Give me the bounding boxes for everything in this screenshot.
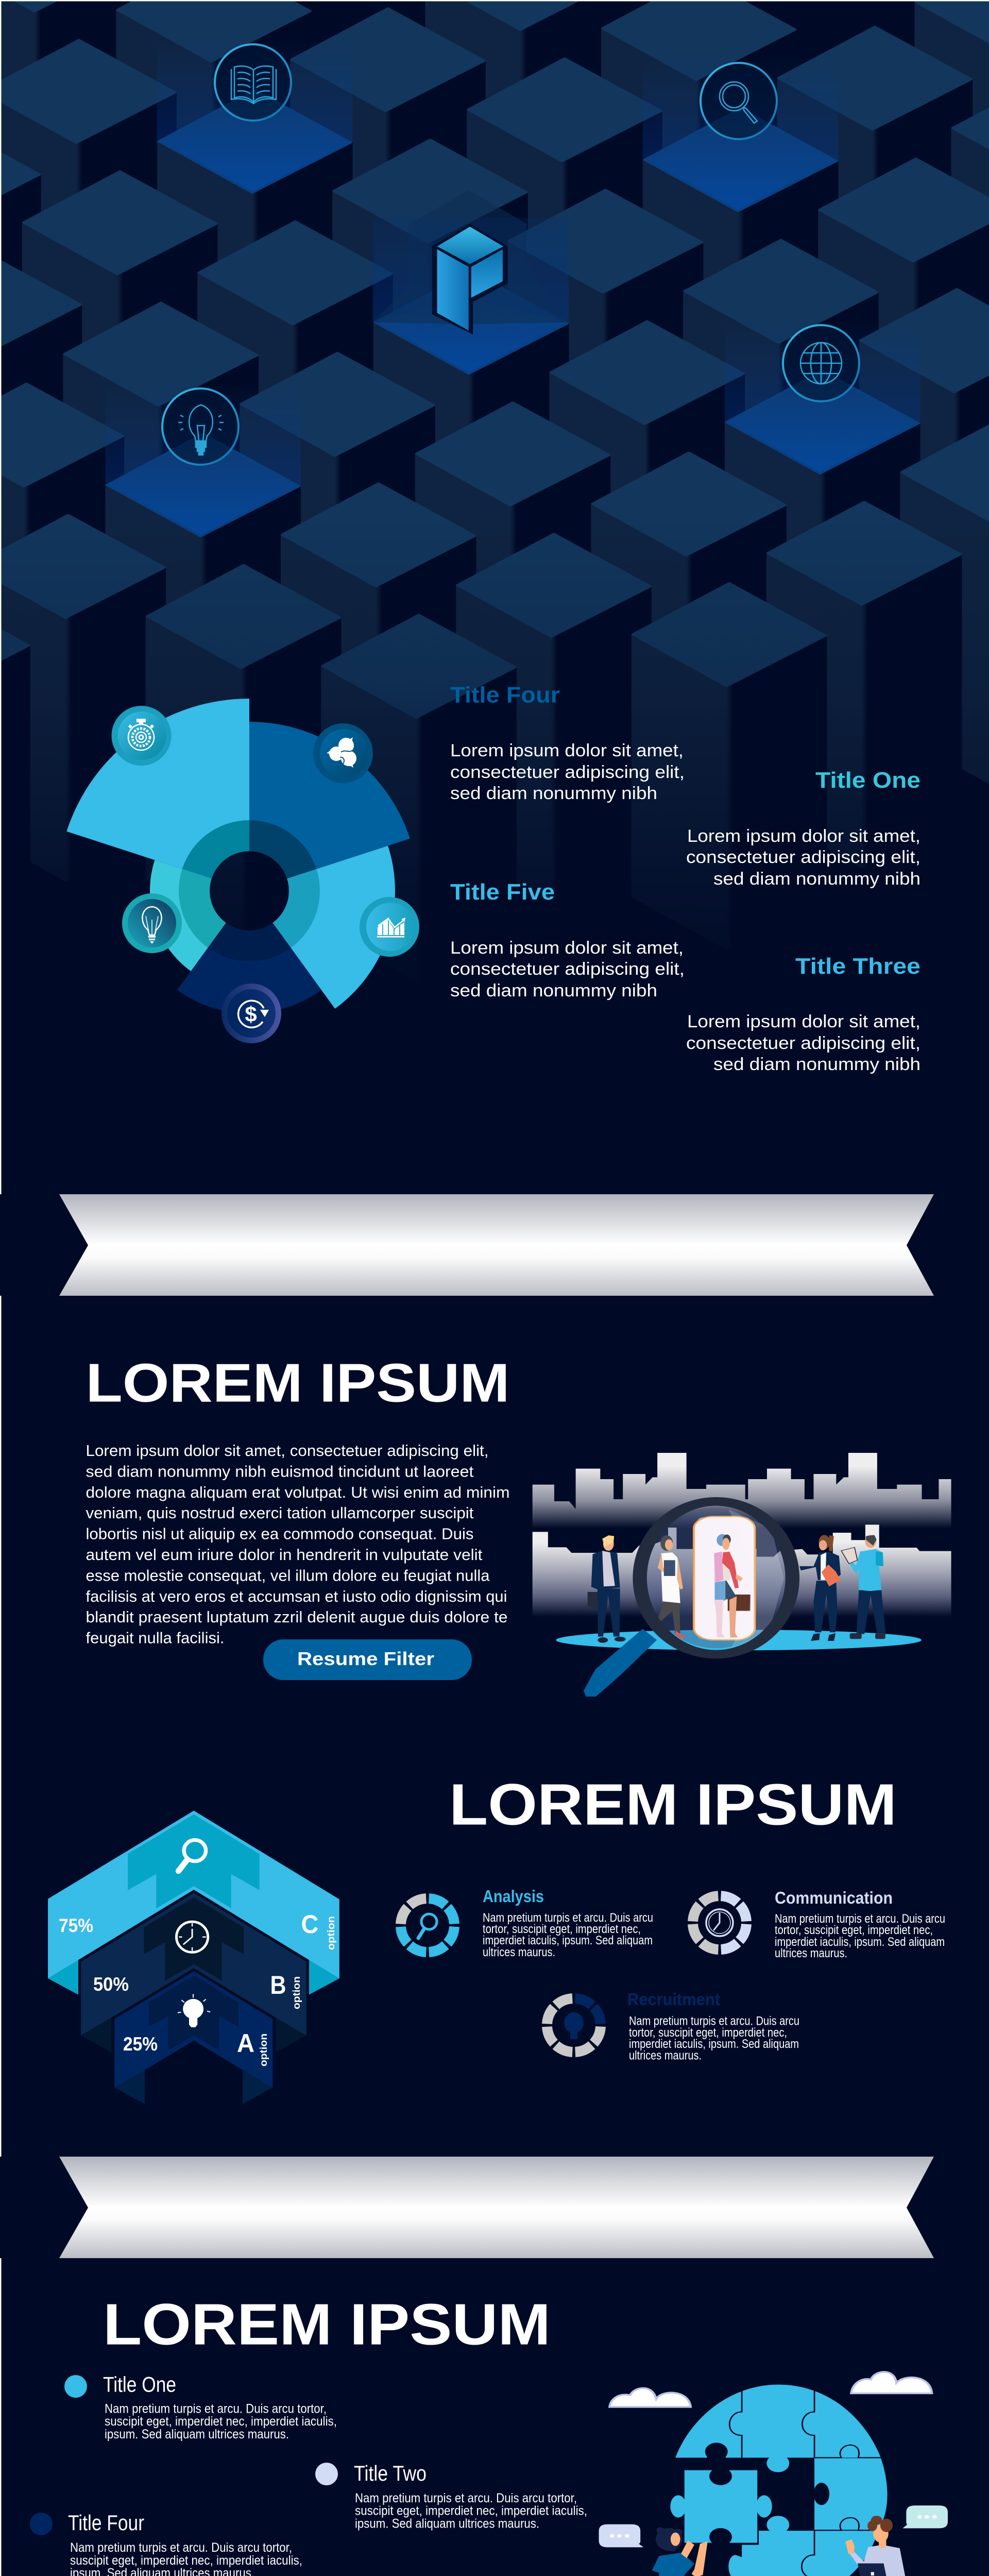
illustration: puzzle light bulb with two people [556, 2372, 989, 2576]
chevron B [81, 1893, 306, 2052]
man with briefcase [588, 1535, 626, 1643]
magnifier handle [584, 1629, 657, 1697]
icon: dollar cycle: $ [245, 1002, 257, 1026]
button: Resume Filter: Resume Filter [297, 1648, 434, 1669]
list item: Title One: Title One [103, 2372, 176, 2397]
text block: Title Five: sed diam nonummy nibh [450, 981, 657, 1001]
label: 25% A [123, 2029, 269, 2066]
illustration: recruiters and magnifier over skyline [533, 1453, 951, 1697]
text block: Title Four: Lorem ipsum dolor sit amet, [450, 741, 684, 760]
man with clipboard [841, 1535, 885, 1639]
hero: isometric cube field [0, 0, 989, 1005]
segment: navy bottom [177, 923, 321, 1013]
segment: teal left [150, 860, 226, 971]
text block: Title One: Lorem ipsum dolor sit amet, [687, 826, 920, 846]
panel: pie chart with five segments [66, 699, 419, 1043]
text block: section two paragraph: dolore magna aliquam erat volutpat. Ut wisi enim ad minim [86, 1483, 510, 1501]
text block: Title Three: sed diam nonummy nibh [713, 1055, 920, 1074]
text block: Title Five: Title Five [450, 879, 555, 905]
text block: Title Three: Lorem ipsum dolor sit amet, [687, 1012, 920, 1031]
text block: Analysis: ultrices maurus. [483, 1945, 555, 1959]
text block: Analysis: tortor, suscipit eget, imperdiet nec, [483, 1922, 641, 1936]
icon: dollar cycle [221, 984, 281, 1043]
text block: Communication: ultrices maurus. [775, 1946, 847, 1960]
label: 75% C: C [301, 1910, 318, 1939]
bulb puzzle head [675, 2385, 888, 2576]
person left [650, 2527, 708, 2576]
label: 50% B: option [292, 1976, 302, 2009]
text block: Analysis: Nam pretium turpis et arcu. Duis arcu [483, 1911, 653, 1925]
icon: analysis ring [399, 1897, 456, 1954]
woman in white dress [658, 1535, 685, 1639]
icon: clock white [176, 1922, 208, 1952]
text block: Title Five [450, 879, 685, 1001]
text block: section two paragraph: sed diam nonummy nibh euismod tincidunt ut laoreet [86, 1462, 474, 1480]
list item: Title Two: ipsum. Sed aliquam ultrices maurus. [355, 2516, 539, 2531]
icon: book [215, 44, 291, 121]
icon: bulb white [178, 1994, 210, 2027]
text block: Recruitment: imperdiet iaculis, ipsum. Sed aliquam [629, 2037, 799, 2051]
text block: Communication: tortor, suscipit eget, imperdiet nec, [775, 1923, 933, 1937]
list item: Title Two: Nam pretium turpis et arcu. Duis arcu tortor, [355, 2491, 577, 2505]
icon: growth chart [360, 897, 419, 957]
icon: magnifier white [179, 1840, 206, 1871]
text block: Title Three: Title Three [795, 954, 920, 979]
list item: Title One: Nam pretium turpis et arcu. Duis arcu tortor, [105, 2402, 327, 2416]
text block: Title One [686, 768, 920, 889]
icon: recruitment ring [545, 1997, 602, 2054]
label: 25% A: option [259, 2033, 269, 2066]
woman with folder [799, 1535, 841, 1641]
ribbon banner one [0, 1194, 989, 1296]
button: Resume Filter [263, 1639, 472, 1680]
label: 50% B: B [270, 1971, 286, 1999]
text block: section two paragraph: lobortis nisl ut aliquip ex ea commodo consequat. Duis [86, 1525, 473, 1543]
lens glare [729, 1510, 784, 1647]
ground ellipse [556, 1630, 922, 1650]
label: 25% A: A [237, 2029, 254, 2058]
text block: Title One: Title One [815, 768, 920, 793]
list item: Title One: ipsum. Sed aliquam ultrices maurus. [105, 2427, 289, 2442]
text block: section two paragraph: blandit praesent luptatum zzril delenit augue duis dolore te [86, 1608, 508, 1626]
text block: Analysis: Analysis [483, 1887, 544, 1906]
text block: Recruitment [627, 1990, 799, 2063]
text block: Title Three: consectetuer adipiscing elit, [686, 1033, 920, 1053]
list item: Title Two: suscipit eget, imperdiet nec, imperdiet iaculis, [355, 2504, 587, 2518]
person right [845, 2516, 915, 2576]
text block: Communication: Nam pretium turpis et arcu. Duis arcu [775, 1912, 945, 1926]
speech bubbles [599, 2505, 948, 2547]
clouds [609, 2372, 932, 2407]
label: 75% C: option [326, 1916, 337, 1950]
text block: Recruitment: Nam pretium turpis et arcu. Duis arcu [629, 2014, 799, 2028]
list item: Title Four: suscipit eget, imperdiet nec, imperdiet iaculis, [70, 2553, 302, 2568]
chevron C [48, 1811, 339, 1995]
text block: Title Three [686, 954, 920, 1074]
central logo cube [372, 190, 568, 335]
icon: outline bulb [122, 893, 182, 953]
list item: Title Two: Title Two [354, 2461, 427, 2485]
depth fade over cubes [1, 641, 989, 981]
list item: Title Four: Nam pretium turpis et arcu. Duis arcu tortor, [70, 2540, 292, 2555]
label: 50% B: 50% [93, 1974, 129, 1995]
text block: Title One: sed diam nonummy nibh [713, 869, 920, 889]
text block: Analysis [483, 1887, 653, 1959]
text block: section two paragraph: Lorem ipsum dolor sit amet, consectetuer adipiscing elit, [86, 1442, 488, 1460]
text block: Communication: Communication [775, 1888, 893, 1907]
heading: Lorem Ipsum section two: LOREM IPSUM [86, 1353, 510, 1414]
segment: light upper left [66, 699, 249, 878]
lens glass [645, 1507, 787, 1648]
text block: Title Four: Title Four [450, 682, 560, 708]
text block: Title One: consectetuer adipiscing elit, [686, 848, 920, 867]
icon: magnifier [701, 63, 777, 139]
text block: section two paragraph [86, 1442, 510, 1647]
skyline back [533, 1453, 951, 1529]
ribbon banner two [0, 2157, 989, 2258]
icon: globe [783, 325, 859, 401]
heading: Lorem Ipsum section three: LOREM IPSUM [449, 1772, 897, 1837]
list item: Title One: suscipit eget, imperdiet nec, imperdiet iaculis, [105, 2414, 337, 2429]
label: 75% C: 75% [59, 1915, 93, 1936]
label: 25% A: 25% [123, 2033, 158, 2055]
display door with candidate [694, 1516, 755, 1640]
held puzzle piece [670, 2467, 772, 2546]
chart: stacked chevrons 75 50 25 [48, 1811, 339, 2104]
skyline front [533, 1524, 951, 1617]
text block: section two paragraph: feugait nulla facilisi. [86, 1629, 225, 1647]
icon: speech bubbles [313, 723, 373, 783]
list item: Title Two [315, 2461, 587, 2531]
segment: dark upper right [249, 722, 410, 878]
chevron A [114, 1971, 272, 2104]
text block: Recruitment: tortor, suscipit eget, imperdiet nec, [629, 2026, 787, 2040]
list item: Title One [64, 2372, 337, 2442]
icon: stopwatch gear [111, 706, 171, 766]
text block: Recruitment: ultrices maurus. [629, 2048, 702, 2063]
text block: section two paragraph: esse molestie consequat, vel illum dolore eu feugiat nulla [86, 1566, 490, 1584]
icon: light bulb [162, 388, 238, 465]
text block: section two paragraph: facilisis at vero eros et accumsan et iusto odio dignissim qui [86, 1587, 507, 1605]
text block: Title Four [450, 682, 685, 803]
heading: Lorem Ipsum section four: LOREM IPSUM [103, 2292, 551, 2357]
label: 50% B [93, 1971, 302, 2009]
text block: section two paragraph: veniam, quis nostrud exerci tation ullamcorper suscipit [86, 1504, 474, 1522]
magnifier ring [640, 1501, 792, 1654]
text block: Analysis: imperdiet iaculis, ipsum. Sed aliquam [483, 1934, 653, 1947]
text block: Communication: imperdiet iaculis, ipsum. Sed aliquam [775, 1935, 945, 1949]
text block: Recruitment: Recruitment [627, 1990, 720, 2009]
segment: light lower right [272, 846, 395, 1009]
text block: Title Five: consectetuer adipiscing elit, [450, 959, 685, 979]
label: 75% C [59, 1910, 337, 1950]
icon: communication ring [691, 1894, 748, 1951]
text block: Communication [775, 1888, 945, 1960]
text block: Title Four: sed diam nonummy nibh [450, 784, 657, 803]
list item: Title Four [30, 2511, 302, 2576]
text block: Title Four: consectetuer adipiscing elit, [450, 762, 685, 782]
text block: Title Five: Lorem ipsum dolor sit amet, [450, 938, 684, 958]
text block: section two paragraph: autem vel eum iriure dolor in hendrerit in vulputate velit [86, 1546, 483, 1564]
list item: Title Four: Title Four [68, 2511, 144, 2535]
